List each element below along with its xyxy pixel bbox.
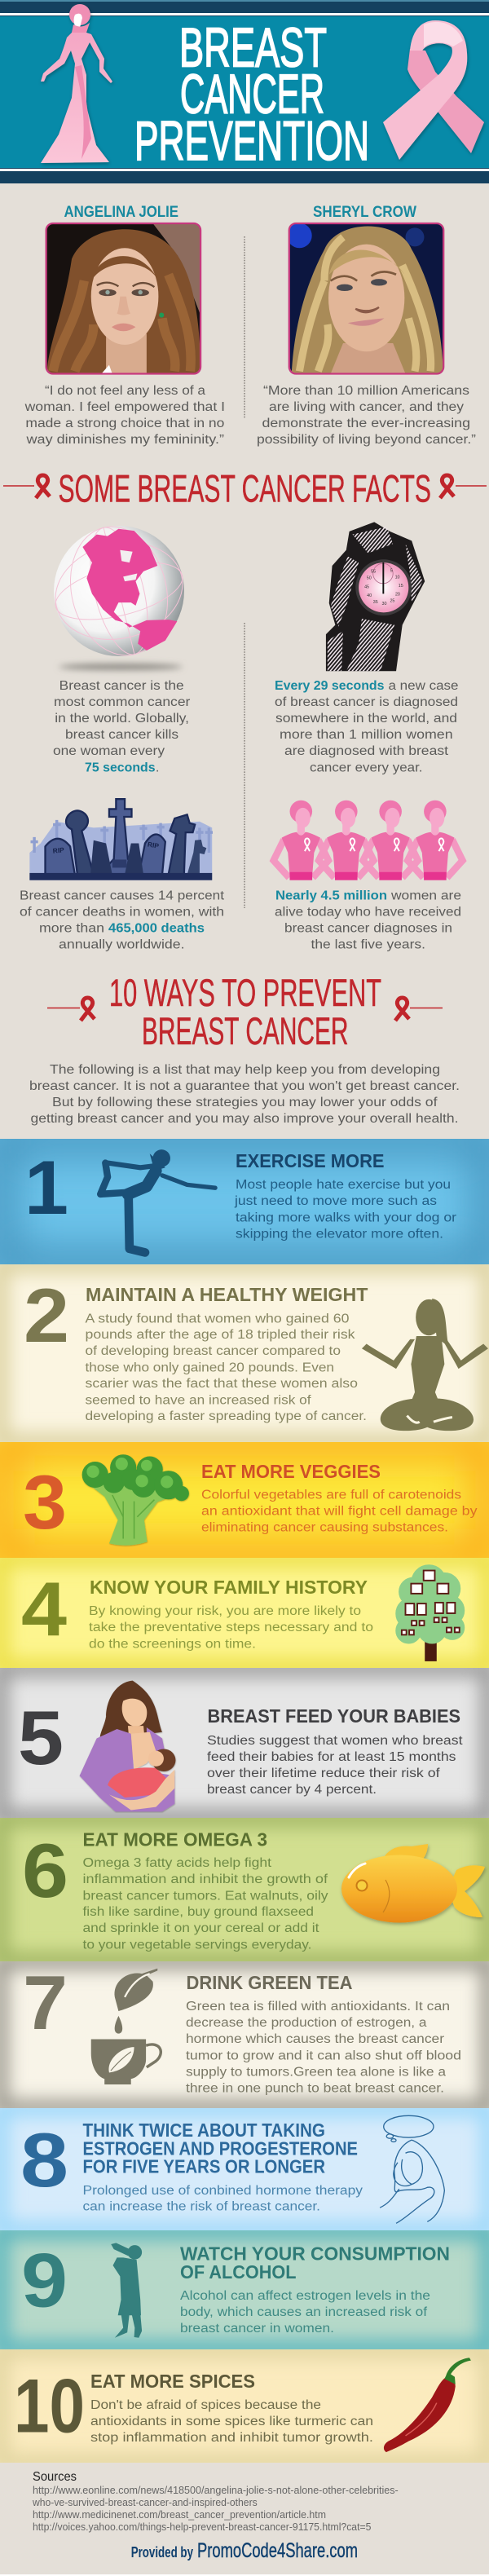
icon: graveyard (29, 799, 213, 880)
icon: meditating woman (362, 1299, 488, 1431)
heading: 10 ways to prevent breast cancer: BREAST CANCER (142, 1009, 349, 1052)
text: fact 3: 465,000 deaths (108, 921, 205, 936)
body text (201, 1489, 478, 1534)
heading (83, 2119, 358, 2177)
body text (186, 2000, 461, 2095)
icon: hand holding stopwatch: 50 (367, 576, 372, 580)
quote: Sheryl Crow (257, 384, 476, 447)
icon: chili pepper (384, 2358, 471, 2452)
body text: those who only gained 20 pounds. Even (85, 1361, 334, 1374)
heading: DRINK GREEN TEA (186, 1972, 352, 1993)
body text (180, 2289, 430, 2336)
body text: eliminating cancer causing substances. (201, 1521, 448, 1534)
text: fact 1: . (156, 761, 159, 774)
title (134, 16, 369, 172)
icon: tea leaf and cup (91, 1969, 161, 2084)
number 6: 6 (22, 1828, 68, 1913)
body text (85, 1312, 367, 1423)
body text (83, 1856, 328, 1952)
body text: an antioxidant that will fight cell damage by (201, 1505, 478, 1518)
quote: Sheryl Crow: possibility of living beyond cancer.” (257, 433, 476, 447)
icon: family tree (396, 1565, 464, 1661)
sources: http://www.medicinenet.com/breast_cancer_prevention/article.htm (33, 2509, 326, 2521)
icon: hand holding stopwatch: 55 (371, 569, 376, 574)
body text: tumor to grow and it can also shut off blood (186, 2049, 461, 2062)
heading: Sheryl Crow: SHERYL CROW (313, 203, 417, 221)
quote: Angelina Jolie: way diminishes my femininity.” (25, 433, 224, 447)
icon: hand holding stopwatch: 40 (367, 593, 372, 598)
number 3: 3 (23, 1459, 67, 1545)
icon: woman drinking silhouette (111, 2243, 142, 2338)
heading: 10 ways to prevent breast cancer (47, 971, 443, 1052)
text: fact 4 (275, 889, 461, 952)
icon: hand holding stopwatch: 45 (364, 584, 369, 589)
text: intro paragraph (29, 1063, 460, 1126)
panel: 6 eat more omega 3 (0, 1818, 489, 1961)
heading: EAT MORE VEGGIES (201, 1461, 381, 1482)
panel: 2 maintain a healthy weight (0, 1264, 489, 1442)
body text: supply to tumors.Green tea alone is like a (186, 2066, 446, 2079)
heading: ESTROGEN AND PROGESTERONE (83, 2137, 358, 2159)
body text: Prolonged use of conbined hormone therapy (83, 2184, 363, 2198)
title: PREVENTION (134, 110, 369, 172)
number 8: 8 (20, 2117, 68, 2203)
body text: breast cancer in women. (180, 2322, 334, 2336)
body text: developing a faster spreading type of cancer. (85, 1409, 367, 1423)
panel: 5 breast feed your babies (0, 1668, 489, 1818)
quote: Sheryl Crow: “More than 10 million Americans (263, 384, 469, 398)
body text: fish like sardine, buy ground flaxseed (83, 1905, 314, 1919)
title: CANCER (180, 64, 324, 126)
text: fact 1: 75 seconds (85, 761, 156, 774)
body text (234, 1178, 456, 1241)
text: intro paragraph: The following is a list that may help keep you from developing (50, 1063, 440, 1077)
heading: BREAST FEED YOUR BABIES (207, 1705, 460, 1727)
sources: http://www.eonline.com/news/418500/angelina-jolie-s-not-alone-other-celebrities- (33, 2485, 399, 2496)
text: fact 2: somewhere in the world, and (275, 712, 457, 726)
text: fact 3: Breast cancer causes 14 percent (20, 889, 225, 903)
icon: pink ribbon (383, 20, 484, 160)
photo: Angelina Jolie (46, 223, 200, 373)
sources (32, 2470, 399, 2533)
text: fact 1: breast cancer kills (65, 728, 178, 742)
photo: Sheryl Crow (287, 223, 443, 373)
body text: feed their babies for at least 15 months (207, 1750, 456, 1764)
body text: body, which causes an increased risk of (180, 2305, 428, 2319)
icon: hand holding stopwatch: 25 (390, 598, 394, 603)
body text: seemed to have an increased risk of (85, 1394, 311, 1407)
body text: can increase the risk of breast cancer. (83, 2199, 320, 2214)
heading: MAINTAIN A HEALTHY WEIGHT (86, 1284, 368, 1305)
body text: inflammation and inhibit the growth of (83, 1872, 328, 1886)
text: intro paragraph: getting breast cancer and you may also improve your overall health. (31, 1112, 458, 1126)
body text: A study found that women who gained 60 (85, 1312, 350, 1325)
body text: pounds after the age of 18 tripled their risk (85, 1328, 355, 1342)
sources: http://voices.yahoo.com/things-help-prevent-breast-cancer-91175.html?cat=5 (33, 2521, 371, 2533)
icon: mother breastfeeding (80, 1681, 175, 1811)
sources: Sources (33, 2470, 77, 2484)
text: fact 1: Breast cancer is the (59, 679, 184, 693)
heading: Angelina Jolie: ANGELINA JOLIE (64, 203, 178, 221)
panel: 1 exercise more (0, 1139, 489, 1264)
body text: Alcohol can affect estrogen levels in the (180, 2289, 430, 2303)
body text: decrease the production of estrogen, a (186, 2016, 427, 2030)
body text: Most people hate exercise but you (236, 1178, 451, 1192)
panel: 4 know your family history (0, 1558, 489, 1668)
text: fact 3 (20, 889, 225, 952)
icon: broccoli (82, 1454, 189, 1546)
number 10: 10 (14, 2362, 85, 2449)
icon: hand holding stopwatch: 35 (373, 600, 378, 605)
heading: EXERCISE MORE (236, 1150, 385, 1171)
number 1: 1 (24, 1145, 68, 1230)
icon: hand holding stopwatch: 10 (395, 575, 400, 580)
body text: breast cancer tumors. Eat walnuts, oily (83, 1890, 328, 1903)
text: fact 3: more than (39, 921, 104, 936)
body text: over their lifetime reduce their risk of (207, 1767, 440, 1780)
text: fact 2: Every 29 seconds (275, 679, 385, 693)
text: fact 3: annually worldwide. (59, 937, 184, 952)
body text: Studies suggest that women who breast (207, 1734, 463, 1748)
text: fact 1: one woman every (53, 744, 165, 758)
text: fact 2 (275, 679, 458, 774)
panel: 8 think twice about hormone therapy (0, 2108, 489, 2230)
icon: omega 3 fish capsule (341, 1844, 485, 1922)
quote: Angelina Jolie: made a strong choice that in no (25, 417, 224, 430)
heading: EAT MORE SPICES (90, 2371, 255, 2392)
icon: yoga pose (100, 1149, 215, 1252)
panel: 10 eat more spices (0, 2349, 489, 2463)
heading (180, 2243, 450, 2283)
icon: globe (45, 516, 193, 670)
heading: FOR FIVE YEARS OR LONGER (83, 2155, 325, 2177)
body text: stop inflammation and inhibit tumor growth. (90, 2431, 373, 2445)
panel: celebrity quotes (24, 203, 476, 447)
body text: of developing breast cancer compared to (85, 1344, 341, 1358)
quote: Angelina Jolie: “I do not feel any less of a (45, 384, 205, 398)
number 7: 7 (23, 1960, 68, 2045)
icon: hand holding stopwatch: 30 (382, 602, 386, 607)
panel: 9 watch your consumption of alcohol (0, 2230, 489, 2349)
number 2: 2 (24, 1273, 69, 1358)
body text (89, 1604, 373, 1652)
body text: to your vegetable servings everyday. (83, 1939, 311, 1952)
body text: By knowing your risk, you are more likely to (89, 1604, 361, 1618)
icon: hand holding stopwatch: 20 (395, 592, 400, 597)
text: fact 2: of breast cancer is diagnosed (275, 695, 458, 709)
text: fact 2: more than 1 million women (280, 728, 453, 742)
sources: who-ve-survived-breast-cancer-and-inspired-others (32, 2497, 258, 2508)
text: fact 1: most common cancer (54, 695, 190, 709)
body text: Omega 3 fatty acids help fight (83, 1856, 272, 1870)
footer credit: PromoCode4Share.com (197, 2539, 358, 2562)
icon: hand holding stopwatch: 15 (399, 584, 403, 589)
icon: thinking woman line art (380, 2115, 444, 2223)
heading: WATCH YOUR CONSUMPTION (180, 2243, 450, 2265)
title: BREAST (179, 16, 327, 78)
quote: Sheryl Crow: are living with cancer, and they (269, 400, 464, 414)
body text: just need to move more such as (234, 1194, 437, 1208)
text: fact 4: breast cancer diagnoses in (284, 921, 452, 936)
number 4: 4 (21, 1566, 67, 1652)
icon: hand holding stopwatch: 5 (390, 569, 393, 574)
body text (207, 1734, 463, 1797)
quote: Angelina Jolie (24, 384, 225, 447)
heading: OF ALCOHOL (180, 2261, 297, 2283)
body text: skipping the elevator more often. (236, 1228, 443, 1241)
number 5: 5 (18, 1695, 64, 1780)
body text: breast cancer by 4 percent. (207, 1783, 377, 1797)
icon: hand holding stopwatch (326, 522, 425, 671)
body text: Colorful vegetables are full of carotenoids (201, 1489, 461, 1502)
body text: scarier was the fact that these women also (85, 1377, 358, 1391)
text: fact 4: the last five years. (311, 937, 425, 952)
text: intro paragraph: breast cancer. It is not a guarantee that you won't get breast cancer. (29, 1079, 460, 1093)
body text: do the screenings on time. (89, 1637, 256, 1652)
text: intro paragraph: But by following these strategies you may lower your odds of (52, 1096, 438, 1109)
text: fact 4: women are (390, 889, 461, 903)
footer credit: Provided by (131, 2544, 193, 2561)
quote: Sheryl Crow: demonstrate the ever-increasing (262, 417, 470, 430)
text: fact 2: cancer every year. (310, 761, 422, 774)
body text: three in one punch to beat breast cancer. (186, 2082, 444, 2095)
body text (90, 2398, 373, 2445)
text: fact 1: in the world. Globally, (55, 712, 189, 726)
header banner (0, 0, 489, 183)
number 9: 9 (21, 2237, 68, 2323)
text: fact 1 (53, 679, 190, 774)
footer credit (131, 2539, 358, 2562)
icon: woman in pink gown (41, 4, 112, 163)
icon: graveyard: RIP (52, 845, 65, 855)
body text: and sprinkle it on your cereal or add it (83, 1921, 319, 1935)
panel: 7 drink green tea (0, 1960, 489, 2108)
icon: four women with pink ribbons (274, 801, 463, 880)
heading: EAT MORE OMEGA 3 (83, 1829, 267, 1850)
quote: Angelina Jolie: woman. I feel empowered that I (24, 400, 225, 414)
panel: facts (20, 516, 463, 952)
body text: take the preventative steps necessary and to (89, 1621, 373, 1634)
panel: 3 eat more veggies (0, 1442, 489, 1558)
body text: Don't be afraid of spices because the (90, 2398, 321, 2412)
text: fact 2: are diagnosed with breast (284, 744, 449, 758)
text: fact 4: Nearly 4.5 million (275, 889, 387, 903)
heading: KNOW YOUR FAMILY HISTORY (90, 1577, 368, 1598)
body text: antioxidants in some spices like turmeric can (90, 2415, 373, 2428)
text: fact 3: of cancer deaths in women, with (20, 905, 224, 920)
body text: hormone which causes the breast cancer (186, 2032, 444, 2046)
body text: taking more walks with your dog or (236, 1211, 456, 1224)
icon: graveyard: RIP (147, 840, 160, 850)
text: fact 2: a new case (388, 679, 458, 693)
body text: Green tea is filled with antioxidants. It can (186, 2000, 450, 2014)
text: fact 4: alive today who have received (275, 905, 461, 920)
heading: THINK TWICE ABOUT TAKING (83, 2119, 325, 2141)
body text (83, 2184, 363, 2214)
